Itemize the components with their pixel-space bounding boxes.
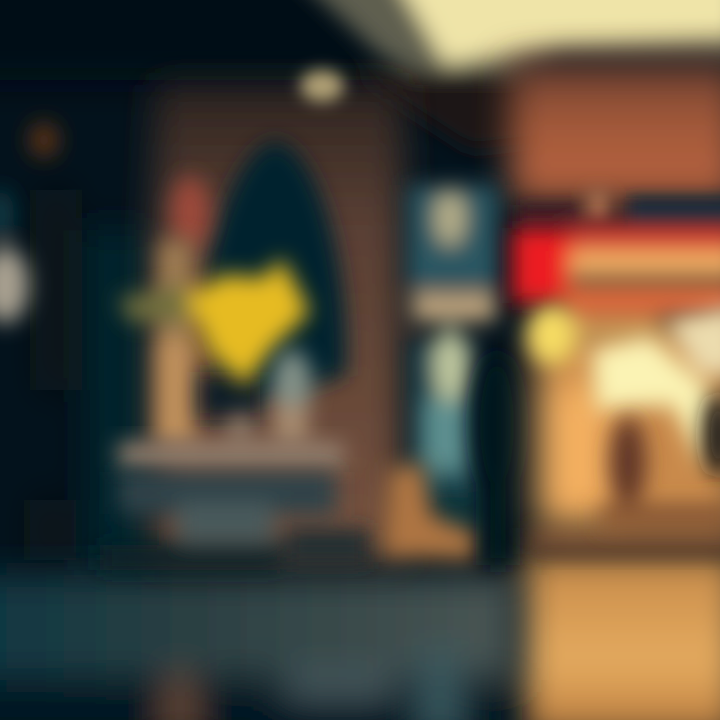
dark store shoppers <box>600 393 720 529</box>
store interior glow <box>535 320 720 530</box>
ceiling <box>280 0 720 150</box>
floor: right warm reflection <box>522 552 720 720</box>
bright store lettering <box>527 305 720 470</box>
dark recess below heart <box>200 372 260 420</box>
amber wall lamp <box>29 122 59 158</box>
yellow heart shape <box>118 258 310 386</box>
ceiling spotlight <box>300 70 344 102</box>
floor: left dark teal <box>0 575 515 720</box>
pale object at left edge <box>0 189 29 323</box>
navy sign band <box>520 190 720 230</box>
dark standing figure <box>473 353 521 565</box>
pale figures in arch <box>227 349 312 448</box>
pedestal base <box>100 472 370 570</box>
tan pillar <box>155 240 195 445</box>
tan boot shape <box>382 462 480 560</box>
pedestal <box>118 442 344 468</box>
teal column <box>408 185 498 540</box>
brown storefront wall <box>510 62 720 202</box>
red accent at arch <box>171 176 209 248</box>
dark left wall <box>0 0 420 570</box>
store base <box>530 528 720 554</box>
dark arch opening <box>205 140 346 405</box>
brown arch wall <box>155 85 403 555</box>
red store sign <box>512 222 720 344</box>
